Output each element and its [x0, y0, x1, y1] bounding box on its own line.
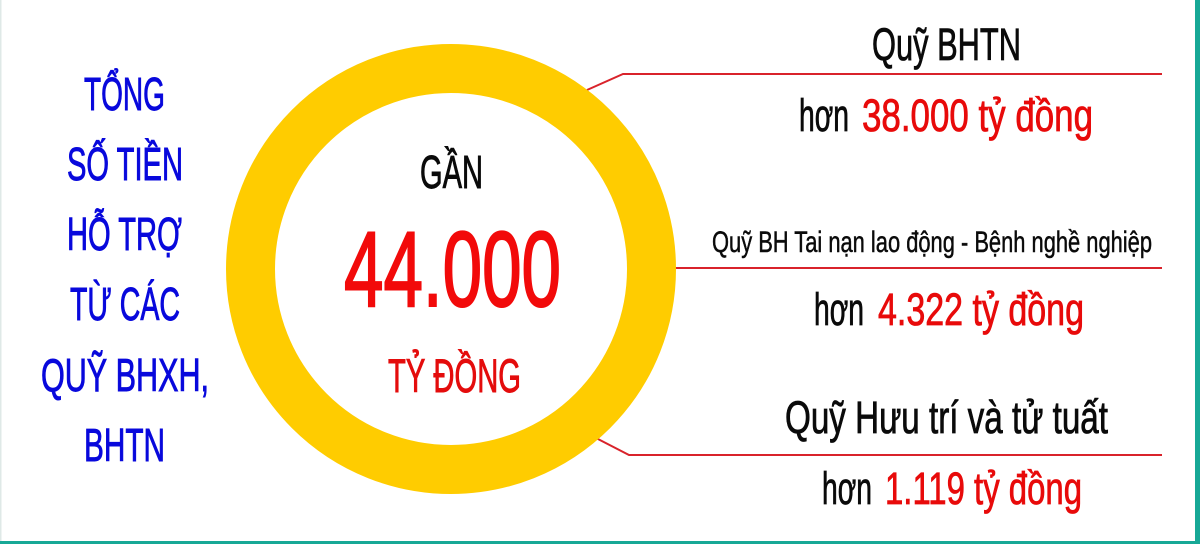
- connector lines: [587, 74, 1162, 455]
- heading: total support amount: TỔNG: [84, 68, 165, 120]
- heading: total support amount: BHTN: [84, 419, 165, 471]
- fund: BHTN: 38.000 tỷ đồng: [862, 90, 1093, 141]
- heading: total support amount: [41, 68, 209, 471]
- yellow ring chart: [250, 68, 652, 470]
- ring centre: total value: TỶ ĐỒNG: [388, 349, 521, 402]
- ring centre: total value: 44.000: [344, 209, 561, 329]
- fund: retirement and survivorship: 1.119 tỷ đồng: [885, 463, 1082, 514]
- fund: occupational accident and disease: [712, 226, 1152, 335]
- ring centre: total value: GẦN: [420, 146, 483, 198]
- fund: BHTN: hơn: [799, 90, 849, 141]
- heading: total support amount: QUỸ BHXH,: [41, 349, 209, 401]
- fund: BHTN: [799, 19, 1093, 141]
- fund: occupational accident and disease: 4.322 tỷ đồng: [878, 284, 1084, 335]
- heading: total support amount: TỪ CÁC: [70, 278, 180, 330]
- heading: total support amount: SỐ TIỀN: [67, 138, 183, 190]
- ring centre: total value: [344, 146, 561, 402]
- fund: retirement and survivorship: [785, 392, 1108, 514]
- fund: retirement and survivorship: hơn: [822, 463, 872, 514]
- heading: total support amount: HỖ TRỢ: [67, 208, 182, 260]
- fund: occupational accident and disease: hơn: [814, 284, 864, 335]
- fund: BHTN: Quỹ BHTN: [872, 19, 1021, 70]
